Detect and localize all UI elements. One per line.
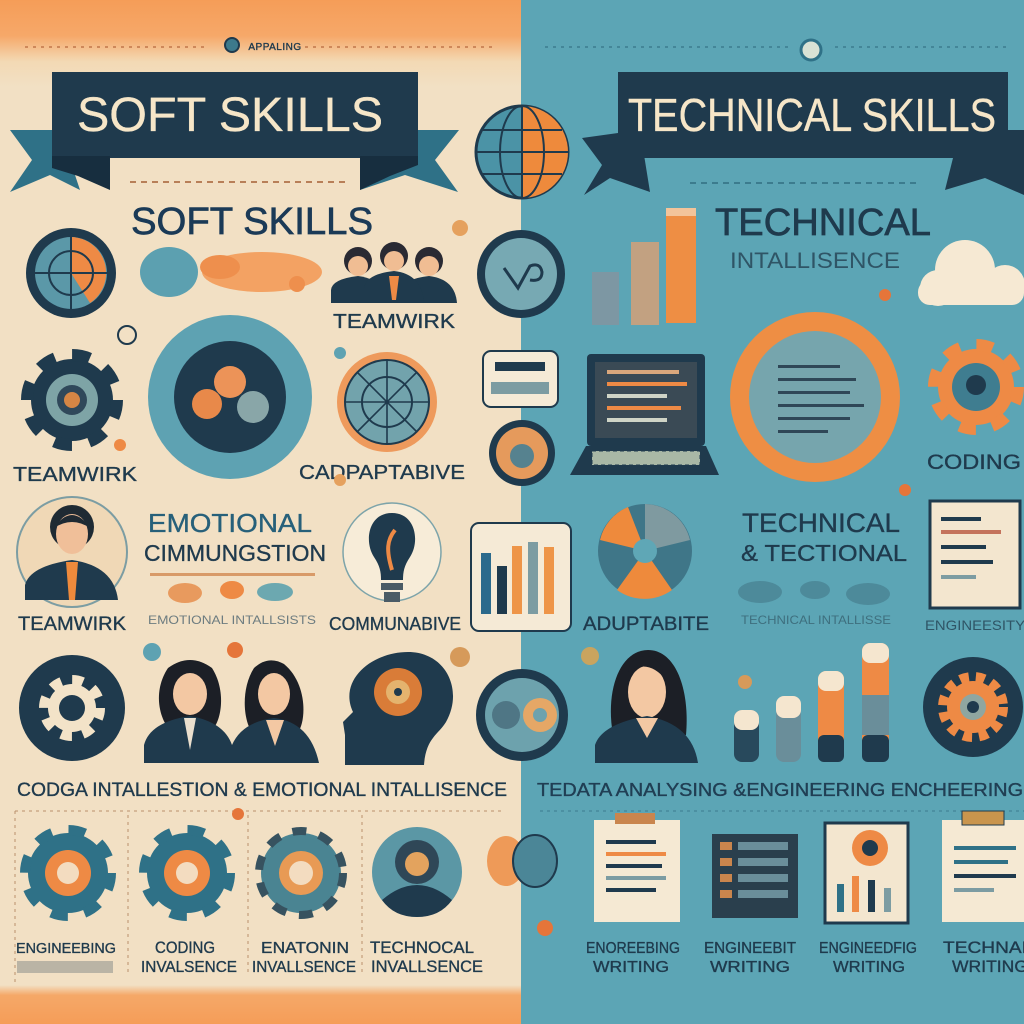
caption: emotional intallsisits: EMOTIONAL INTALLSISTS: [148, 613, 316, 627]
icon: mini chart circle: [477, 230, 565, 318]
labels: technical skills bottom row: WRITING: [952, 957, 1024, 976]
icon: hooded figure circle: [372, 827, 462, 917]
icon: woman: [595, 650, 698, 763]
label: communabive: COMMUNABIVE: [329, 614, 461, 634]
labels: soft skills bottom row: ENATONIN: [261, 940, 349, 957]
labels: technical skills bottom row: ENGINEEBIT: [704, 940, 796, 957]
subheading: intallisence: INTALLISENCE: [730, 248, 900, 273]
icon: gear teal 2: [144, 830, 230, 916]
label: coding: CODING: [927, 451, 1021, 474]
banner ribbon: left tail: [10, 130, 80, 192]
panel: soft skills header: [10, 38, 495, 192]
labels: technical skills bottom row: ENGINEEDFIG: [819, 940, 917, 957]
icon: orange ring: [730, 312, 900, 482]
labels: technical skills bottom row: WRITING: [710, 959, 790, 976]
heading: soft skills: SOFT SKILLS: [131, 201, 373, 243]
panel: soft skills background: [0, 0, 521, 1024]
icon: gear orange: [934, 345, 1018, 429]
heading: technical and technical: TECHNICAL: [742, 508, 900, 538]
heading: emotional communication: EMOTIONAL: [148, 508, 312, 538]
icon: clipboard 1: [594, 813, 680, 922]
icon: head with gears: [343, 652, 453, 765]
icon: gear teal 1: [25, 830, 111, 916]
icon: mixed circle centre: [476, 669, 568, 761]
panel: technical skills header: [545, 40, 1024, 195]
icon: clipboard 2: [942, 811, 1024, 922]
label: engineesity: ENGINEESITY: [925, 617, 1024, 633]
icon: dark data panel: [712, 834, 798, 918]
icon: chart card with badge: [825, 823, 908, 923]
labels: technical skills bottom row: WRITING: [593, 959, 669, 976]
labels: technical skills bottom row: WRITING: [833, 959, 905, 976]
heading: emotional intallisence: CODGA INTALLESTION & EMOTIONAL INTALLISENCE: [17, 780, 507, 801]
banner ribbon: left tail: [582, 130, 650, 195]
top badge: [801, 40, 821, 60]
banner ribbon: right tail: [945, 130, 1024, 195]
labels: soft skills bottom row: CODING: [155, 938, 215, 957]
icon: adaptive wheel: [337, 352, 437, 452]
labels: soft skills bottom row: INVALSENCE: [141, 959, 237, 976]
labels: technical skills bottom row: [586, 938, 1024, 976]
icon: decorative strip: [150, 573, 315, 603]
banner: technical skills: [618, 72, 1008, 158]
icon: two women: [144, 660, 319, 763]
label: cadpaptabive: CADPAPTABIVE: [299, 462, 465, 484]
icon: team of three: [331, 242, 457, 303]
labels: soft skills bottom row: TECHNOCAL: [370, 938, 474, 957]
banner: soft skills: [52, 72, 418, 158]
heading: emotional communication: [144, 508, 326, 566]
label: teamwirk top: TEAMWIRK: [333, 311, 456, 333]
icon: handshake blob: [487, 835, 557, 887]
banner title: SOFT SKILLS: [77, 89, 383, 142]
icon: gear dark circle: [923, 657, 1023, 757]
labels: soft skills bottom row: [16, 938, 483, 976]
icon: light bulb: [343, 503, 441, 602]
heading: emotional communication: CIMMUNGSTION: [144, 540, 326, 566]
labels: soft skills bottom row: ENGINEEBING: [16, 940, 116, 957]
decorative accent dots: [114, 220, 911, 936]
heading: technical and technical: [741, 508, 907, 566]
label: teamwirk left: TEAMWIRK: [13, 464, 138, 486]
label: adaptabite: ADUPTABITE: [583, 614, 709, 635]
icon: person portrait: [17, 497, 127, 607]
icon: radar circle: [26, 228, 116, 318]
icon: gear left: [27, 355, 117, 445]
icon: speech blobs: [140, 247, 322, 297]
icon: faint doodles: [738, 581, 890, 605]
icon: gear white on dark: [19, 655, 125, 761]
icon: gear mixed: [259, 831, 343, 915]
caption: technical intallisse: TECHNICAL INTALLISSE: [741, 613, 891, 627]
chart card: bars: [471, 523, 571, 631]
chart: three bars: [592, 208, 696, 325]
icon: laptop: [570, 354, 719, 475]
labels: technical skills bottom row: TECHNAI: [943, 938, 1024, 957]
labels: soft skills bottom row: INVALLSENCE: [252, 959, 356, 976]
icon: central team circle: [148, 315, 312, 479]
chart: rounded bars: [734, 643, 889, 762]
icon: document card: [930, 501, 1020, 608]
heading: technical: TECHNICAL: [715, 202, 931, 244]
heading: technical and technical: & TECTIONAL: [741, 540, 907, 566]
labels: technical skills bottom row: ENOREEBING: [586, 940, 680, 957]
icon: globe: [476, 106, 568, 198]
heading: data analysing engineering: TEDATA ANALYSING &ENGINEERING ENCHEERING: [537, 780, 1023, 800]
panel: technical skills background: [521, 0, 1024, 1024]
icon: small card: [483, 351, 558, 407]
banner ribbon: right tail: [360, 130, 459, 192]
heading decoration: appealing: APPALING: [248, 42, 302, 53]
labels: soft skills bottom row: INVALLSENCE: [371, 957, 483, 976]
chart: donut pie: [598, 504, 692, 599]
label: teamwirk lower: TEAMWIRK: [18, 614, 126, 635]
icon: orange swirl circle: [489, 420, 555, 486]
icon: cloud: [918, 240, 1024, 306]
